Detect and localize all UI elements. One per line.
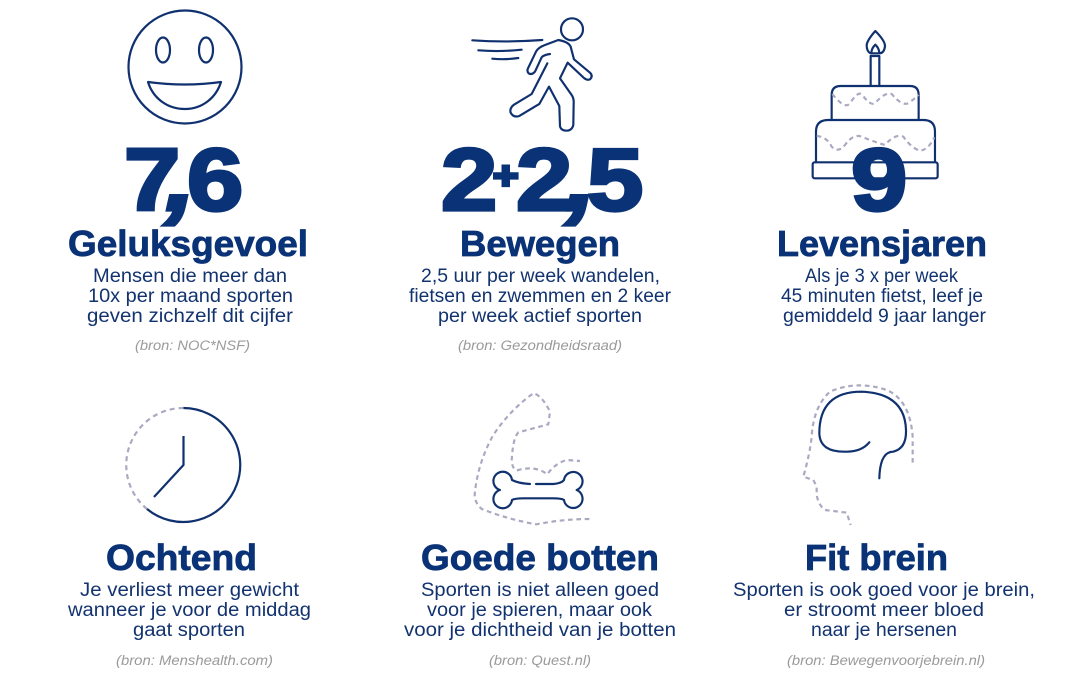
source: NOC*NSF: (bron: NOC*NSF) <box>135 338 250 353</box>
text block: levensjaren: Als je 3 x per week <box>805 266 958 287</box>
heading: Ochtend: Ochtend <box>106 537 257 578</box>
number: 7,6: 6 <box>187 131 243 229</box>
text block: bewegen: fietsen en zwemmen en 2 keer <box>409 286 672 307</box>
text block: levensjaren: gemiddeld 9 jaar langer <box>783 306 987 327</box>
panel: fit brein <box>733 385 1035 668</box>
icon: birthday cake <box>813 31 938 178</box>
number: 2+2,5: 2 <box>441 131 497 229</box>
number: 2+2,5: , <box>564 123 597 231</box>
heading: Levensjaren: Levensjaren <box>777 223 987 264</box>
icon: smiley <box>128 10 242 124</box>
text block: ochtend: wanneer je voor de middag <box>67 600 311 621</box>
text block: ochtend <box>67 580 311 641</box>
icon: clock <box>126 408 240 522</box>
text block: levensjaren <box>781 266 987 327</box>
panel: ochtend <box>67 408 311 668</box>
panel: goede botten <box>404 393 676 668</box>
number: 2+2,5: 5 <box>587 131 643 229</box>
heading: Fit brein: Fit brein <box>805 537 948 578</box>
text block: levensjaren: 45 minuten fietst, leef je <box>781 286 983 307</box>
number: 7,6: 7 <box>124 131 180 229</box>
text block: goede botten: Sporten is niet alleen goed <box>421 580 659 601</box>
text block: fit brein <box>733 580 1035 641</box>
text block: goede botten <box>404 580 676 641</box>
heading: Bewegen: Bewegen <box>460 223 620 264</box>
text block: bewegen: 2,5 uur per week wandelen, <box>421 266 660 287</box>
text block: ochtend: gaat sporten <box>133 620 245 641</box>
text block: goede botten: voor je dichtheid van je botten <box>404 620 676 641</box>
number: 2+2,5: + <box>493 154 519 197</box>
heading: Geluksgevoel: Geluksgevoel <box>68 223 308 264</box>
source: Quest.nl: (bron: Quest.nl) <box>489 653 591 668</box>
panel: bewegen <box>409 18 672 353</box>
text block: geluksgevoel: geven zichzelf dit cijfer <box>87 306 294 327</box>
text block: bewegen <box>409 266 672 327</box>
icon: running person <box>472 18 592 131</box>
source: Menshealth.com: (bron: Menshealth.com) <box>116 653 273 668</box>
source: Gezondheidsraad: (bron: Gezondheidsraad) <box>458 338 622 353</box>
heading: Goede botten: Goede botten <box>421 537 659 578</box>
text block: bewegen: per week actief sporten <box>438 306 642 327</box>
text block: goede botten: voor je spieren, maar ook <box>427 600 653 621</box>
number: 9: 9 <box>851 131 907 229</box>
text block: geluksgevoel: Mensen die meer dan <box>93 266 287 287</box>
text block: fit brein: Sporten is ook goed voor je brein, <box>733 580 1035 601</box>
icon: head with brain <box>803 385 913 525</box>
panel: levensjaren <box>777 31 987 327</box>
number: 2+2,5: 2 <box>516 131 572 229</box>
text block: fit brein: naar je hersenen <box>811 620 957 641</box>
icon: muscle and bone <box>475 393 589 524</box>
text block: ochtend: Je verliest meer gewicht <box>80 580 300 601</box>
number: 7,6: , <box>163 123 196 231</box>
text block: geluksgevoel <box>87 266 294 327</box>
text block: geluksgevoel: 10x per maand sporten <box>88 286 293 307</box>
text block: fit brein: er stroomt meer bloed <box>784 600 984 621</box>
panel: geluksgevoel <box>68 10 308 353</box>
source: Bewegenvoorjebrein.nl: (bron: Bewegenvoorjebrein.nl) <box>787 653 985 668</box>
